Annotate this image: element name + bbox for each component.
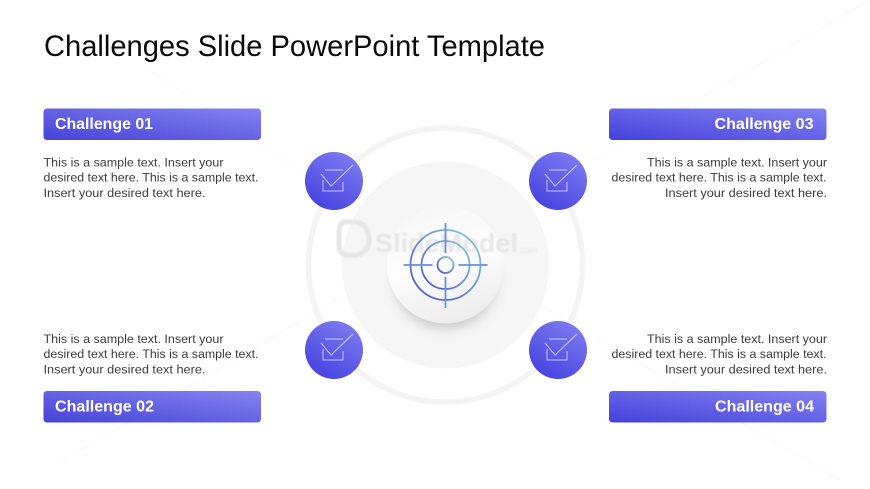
text block: desired text here. This is a sample text. <box>44 347 258 361</box>
text block: Insert your desired text here. <box>44 362 206 376</box>
heading: Challenge 02 <box>55 398 154 416</box>
heading bar <box>609 108 826 140</box>
icon: crosshair target <box>404 223 488 308</box>
heading bar <box>44 391 261 422</box>
heading bar <box>609 391 826 422</box>
panel: challenge 03 <box>609 108 827 200</box>
text block: This is a sample text. Insert your <box>647 332 827 346</box>
central target graphic <box>308 128 582 402</box>
panel: challenge 02 <box>44 332 261 422</box>
text block: Insert your desired text here. <box>665 186 827 200</box>
heading: Challenge 04 <box>715 398 814 416</box>
text block <box>612 156 827 200</box>
middle disc <box>342 162 549 368</box>
icon: badge 03 checked envelope <box>529 152 587 210</box>
heading: Challenge 01 <box>55 116 153 133</box>
heading: Challenge 03 <box>714 116 814 133</box>
outer ring <box>308 128 582 402</box>
icon: badge 04 checked envelope <box>529 321 587 379</box>
text block: Insert your desired text here. <box>44 186 206 200</box>
text block <box>44 332 258 376</box>
text block: This is a sample text. Insert your <box>647 156 827 170</box>
watermark: .com <box>518 245 538 255</box>
sphere <box>387 206 504 324</box>
panel: challenge 04 <box>609 332 827 422</box>
text block <box>612 332 827 376</box>
sphere shadow <box>396 236 496 328</box>
text block: This is a sample text. Insert your <box>44 156 224 170</box>
panel: challenge 01 <box>44 108 261 200</box>
text block: desired text here. This is a sample text. <box>612 347 826 361</box>
watermark <box>339 222 538 258</box>
text block: This is a sample text. Insert your <box>44 332 224 346</box>
icon: badge 01 checked envelope <box>305 152 363 210</box>
text block: Insert your desired text here. <box>665 362 827 376</box>
text block <box>44 156 258 200</box>
title: Challenges Slide PowerPoint Template <box>44 30 545 63</box>
icon: badge 02 checked envelope <box>305 321 363 379</box>
text block: desired text here. This is a sample text. <box>612 170 826 184</box>
heading bar <box>44 108 261 140</box>
watermark: SlideModel <box>375 228 518 258</box>
text block: desired text here. This is a sample text. <box>44 170 258 184</box>
